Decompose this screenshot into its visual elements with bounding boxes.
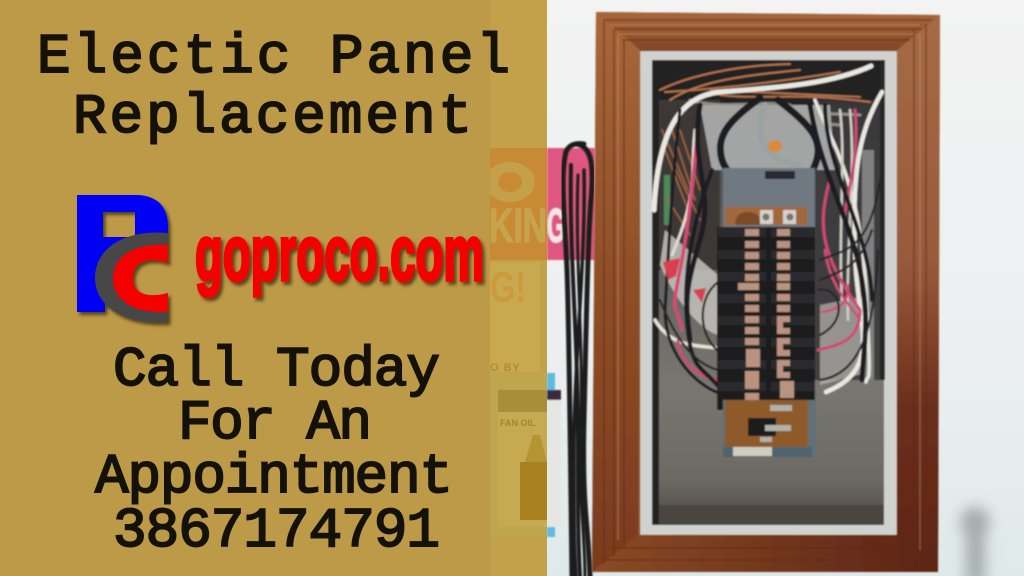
translucent gold overlay strip with poster behind: O BY xyxy=(490,362,521,374)
title xyxy=(37,25,510,149)
translucent gold overlay strip with poster behind xyxy=(485,0,547,576)
left panel xyxy=(0,0,490,576)
website url: goproco.com xyxy=(195,209,484,297)
wall shadow xyxy=(960,507,990,576)
pink sign: G xyxy=(547,200,565,253)
call to action: Appointment xyxy=(95,445,453,509)
title: Electic Panel xyxy=(37,25,510,89)
blue card edge xyxy=(547,373,561,537)
call to action xyxy=(95,338,453,563)
open electrical panel box xyxy=(640,51,897,535)
hanging black cord xyxy=(563,144,592,576)
circuit breakers xyxy=(717,227,815,410)
main breaker plate xyxy=(723,168,815,228)
wall background xyxy=(547,0,1024,576)
pink sign xyxy=(547,148,595,260)
wooden frame xyxy=(592,12,940,572)
call to action: For An xyxy=(178,391,372,455)
translucent gold overlay strip with poster behind: KIN xyxy=(489,200,547,253)
title: Replacement xyxy=(73,85,472,149)
call to action: Call Today xyxy=(113,338,440,402)
lower bus plate xyxy=(723,400,816,457)
translucent gold overlay strip with poster behind: FAN OIL xyxy=(500,418,536,428)
translucent gold overlay strip with poster behind: G! xyxy=(490,263,526,312)
logo: PC xyxy=(77,195,168,322)
bundled wires xyxy=(654,64,882,392)
call to action: 3867174791 xyxy=(113,499,440,563)
